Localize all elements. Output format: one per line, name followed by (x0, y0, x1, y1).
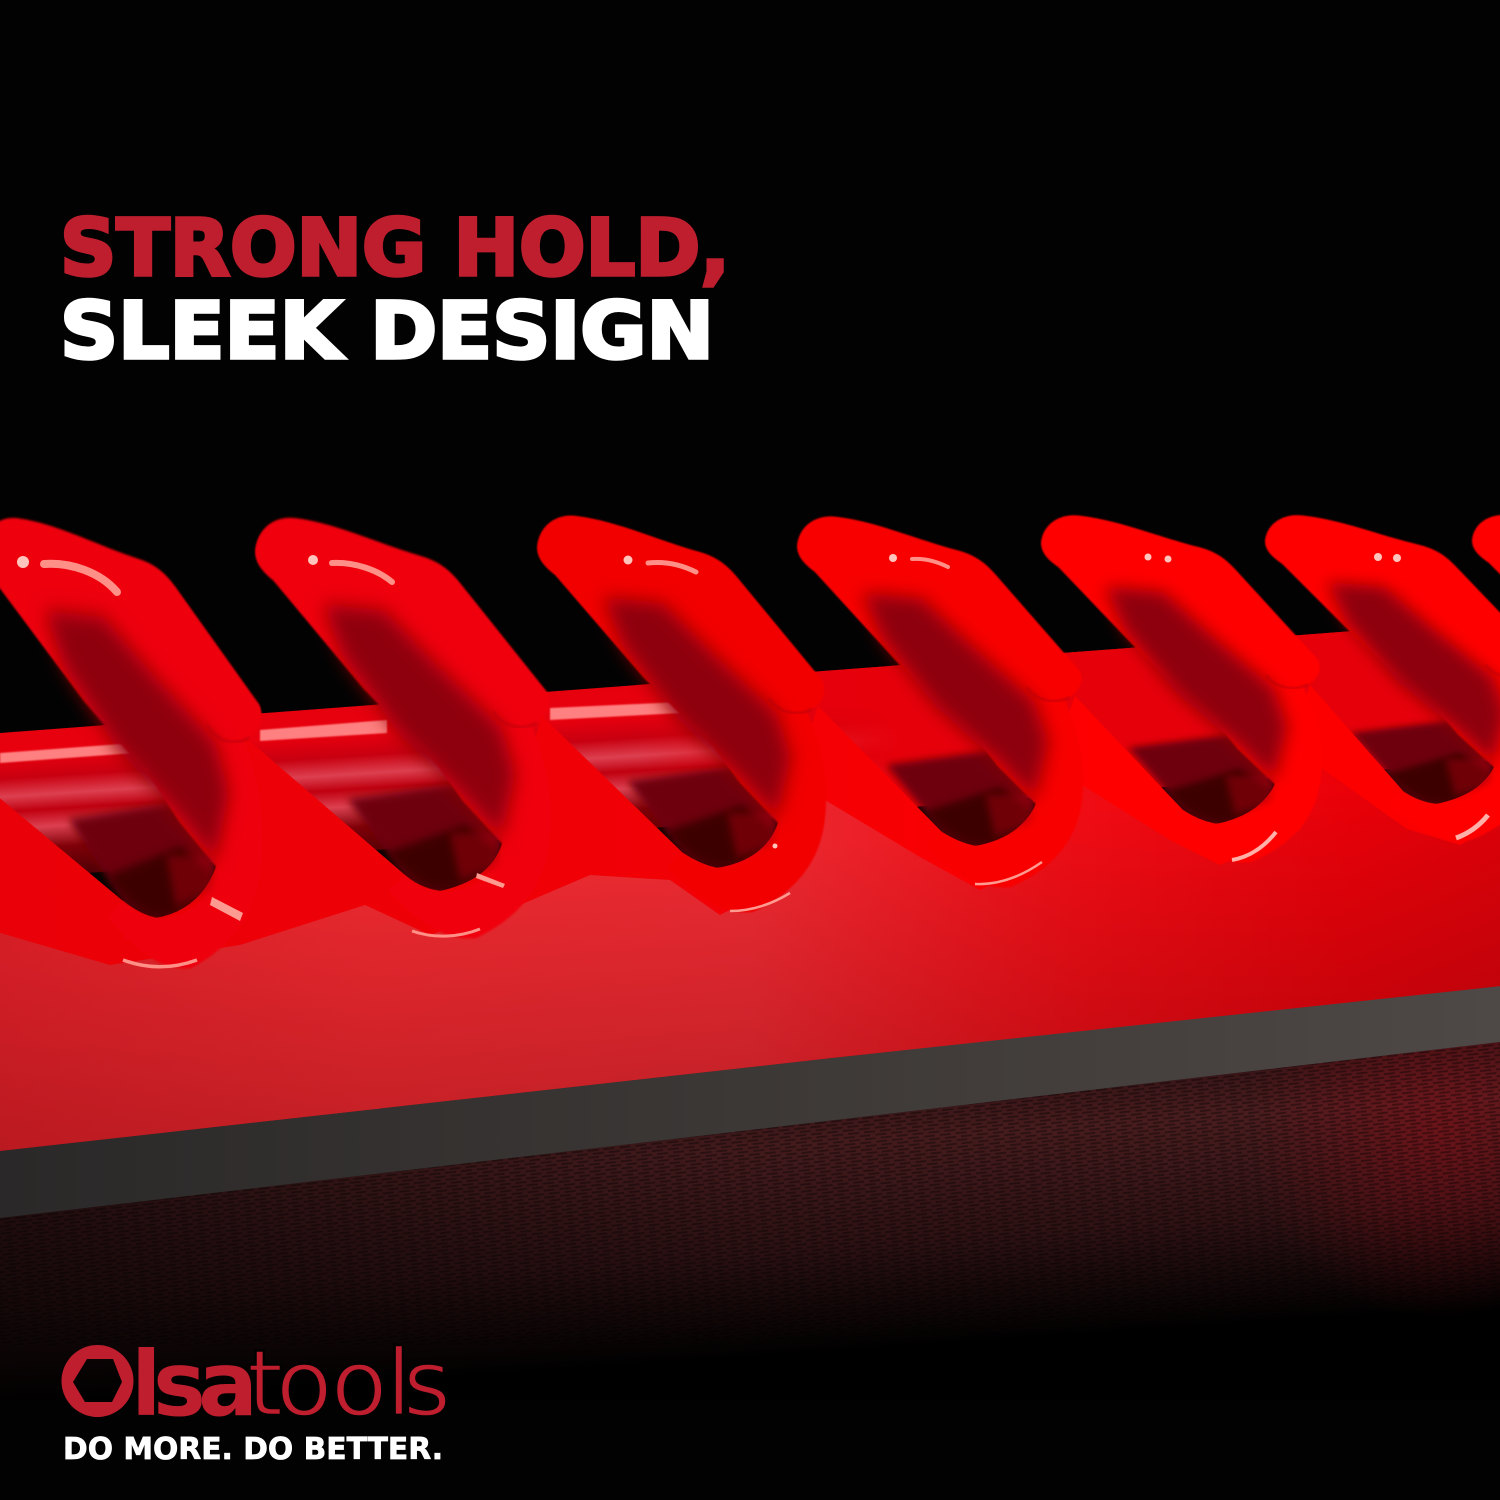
hook 2 (255, 518, 551, 938)
gloss highlights (17, 553, 1488, 967)
holder face (0, 767, 1500, 1152)
icon: hex nut letter O (62, 1345, 134, 1417)
title line 1: STRONG HOLD, (60, 204, 730, 294)
hook 3 (537, 516, 826, 912)
hook 4 (797, 516, 1083, 887)
hook slot shadows (68, 720, 1494, 918)
logo wordmark light part: tools (247, 1330, 451, 1437)
tagline: DO MORE. DO BETTER. (63, 1432, 443, 1467)
back rail (0, 620, 1500, 880)
hook 6 (1265, 515, 1500, 841)
gray base strip (0, 982, 1500, 1218)
fabric surface (0, 1042, 1500, 1400)
hook 1 (0, 518, 263, 968)
hook 5 (1041, 515, 1321, 862)
red holder body (0, 676, 1500, 1152)
logo wordmark bold part: lsa (131, 1332, 258, 1436)
title line 2: SLEEK DESIGN (60, 287, 714, 377)
brand logo (62, 1330, 451, 1467)
hook 7 (1472, 515, 1500, 833)
